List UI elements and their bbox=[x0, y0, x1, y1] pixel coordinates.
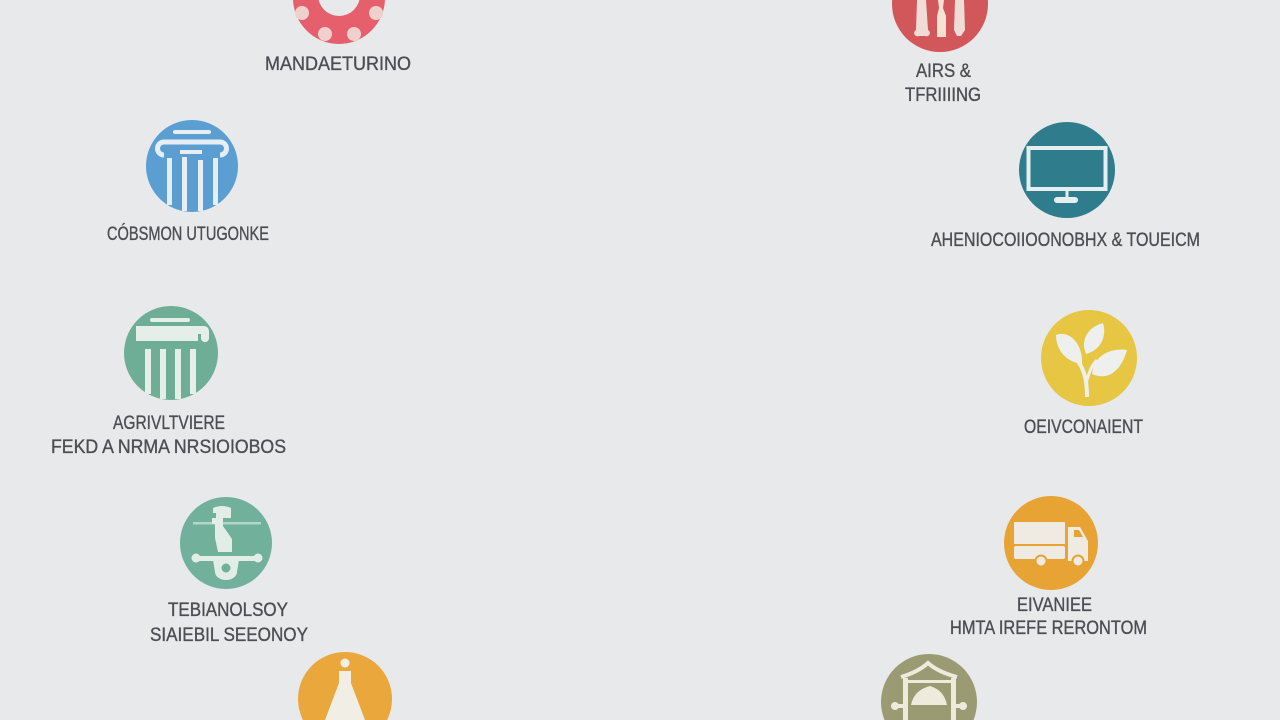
icon: olive pavilion bbox=[881, 654, 977, 720]
label: environment: OEIVCONAIENT bbox=[1024, 417, 1143, 438]
label: finance bbox=[950, 595, 1147, 639]
label: finance: HMTA IREFE RERONTOM bbox=[950, 618, 1147, 639]
icon: arts red bbox=[892, 0, 988, 52]
label: technology: SIAIEBIL SEEONOY bbox=[150, 625, 308, 646]
label: architecture: AHENIOCOIIOONOBHX & TOUEICM bbox=[931, 230, 1200, 251]
label: agriculture: AGRIVLTVIERE bbox=[113, 413, 225, 434]
label: manufacturing: MANDAETURINO bbox=[265, 54, 411, 75]
icon: orange flask bbox=[298, 652, 392, 720]
label: agriculture bbox=[51, 413, 286, 458]
icon: teal monitor bbox=[1019, 122, 1115, 218]
label: agriculture: FEKD A NRMA NRSIOIOBOS bbox=[51, 437, 286, 458]
icon: orange truck bbox=[1004, 496, 1098, 590]
label: arts: AIRS & bbox=[916, 61, 971, 82]
label: finance: EIVANIEE bbox=[1017, 595, 1092, 616]
icon: blue column bbox=[146, 120, 238, 212]
label: arts bbox=[905, 61, 981, 106]
icon: green column bbox=[124, 306, 218, 400]
label: technology: TEBIANOLSOY bbox=[168, 600, 288, 621]
label: technology bbox=[150, 600, 308, 646]
label: arts: TFRIIIING bbox=[905, 85, 981, 106]
label: commerce: CÓBSMON UTUGONKE bbox=[107, 223, 269, 245]
icon: technology bbox=[180, 497, 272, 589]
icon: manufacturing gear bbox=[293, 0, 385, 44]
icon: yellow plant bbox=[1041, 310, 1137, 406]
